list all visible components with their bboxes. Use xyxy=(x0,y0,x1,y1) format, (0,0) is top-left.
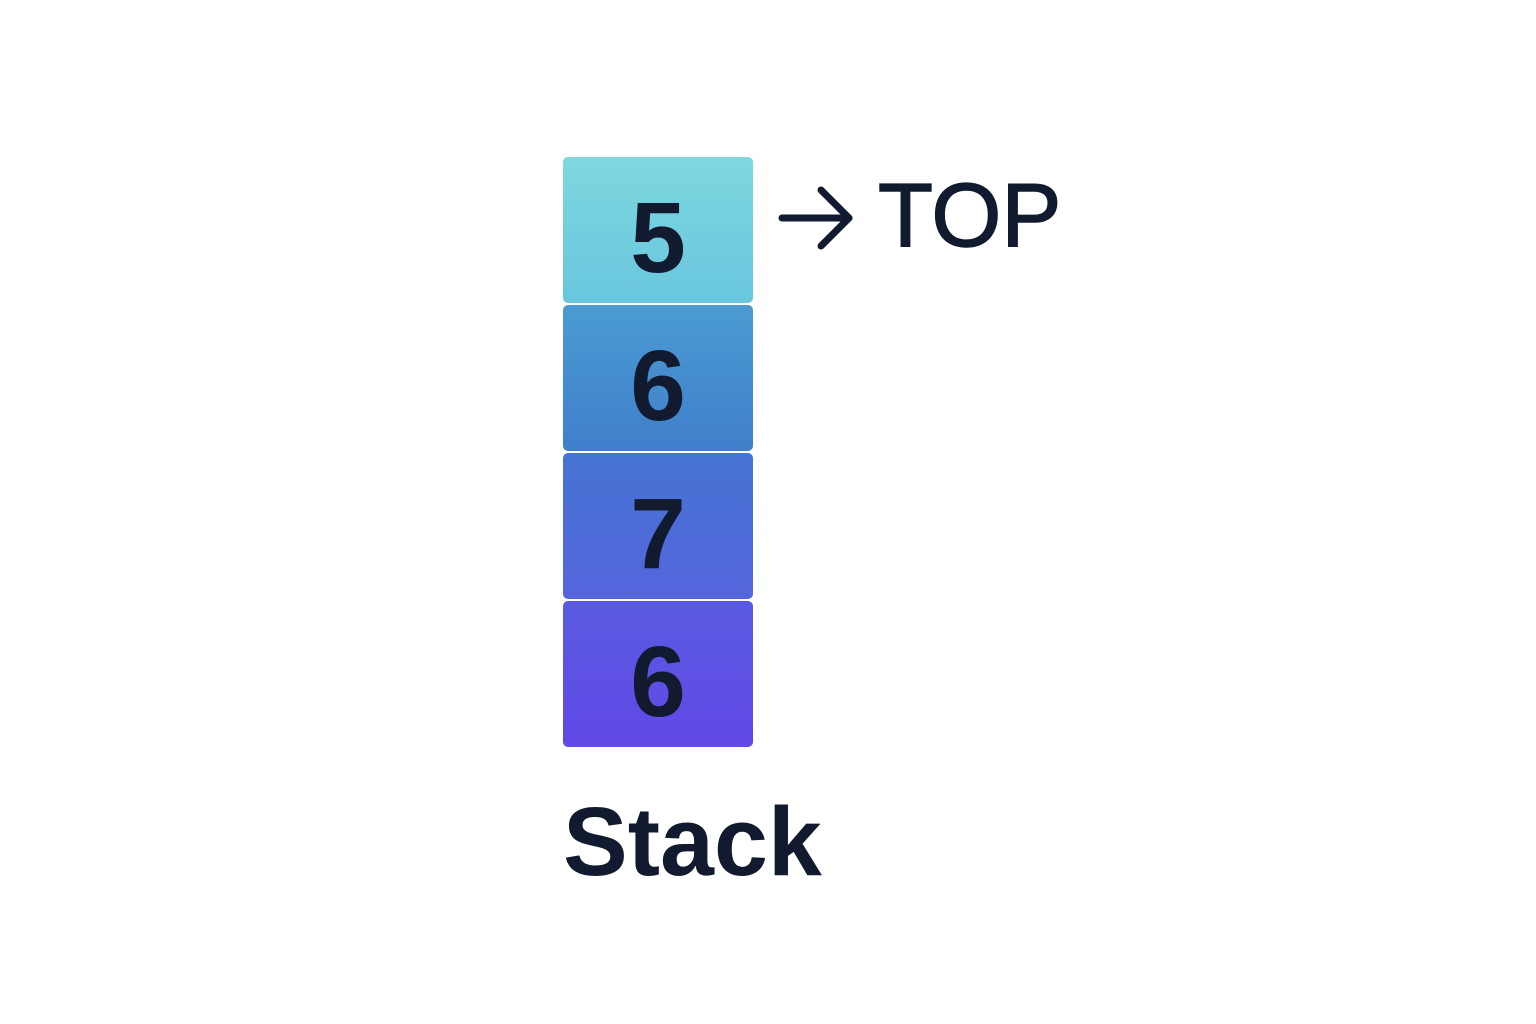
box: 6: 6 xyxy=(630,330,686,442)
box: 5 top: 5 xyxy=(630,182,686,294)
box: 6 bottom: 6 xyxy=(630,626,686,738)
label: TOP: TOP xyxy=(878,166,1061,266)
arrow: top pointer xyxy=(778,186,852,250)
stack diagram xyxy=(563,157,753,747)
box: 7 xyxy=(563,453,753,599)
box: 6 bottom xyxy=(563,601,753,747)
box: 7: 7 xyxy=(630,478,686,590)
box: 5 top xyxy=(563,157,753,303)
title: Stack: Stack xyxy=(563,787,822,896)
box: 6 xyxy=(563,305,753,451)
